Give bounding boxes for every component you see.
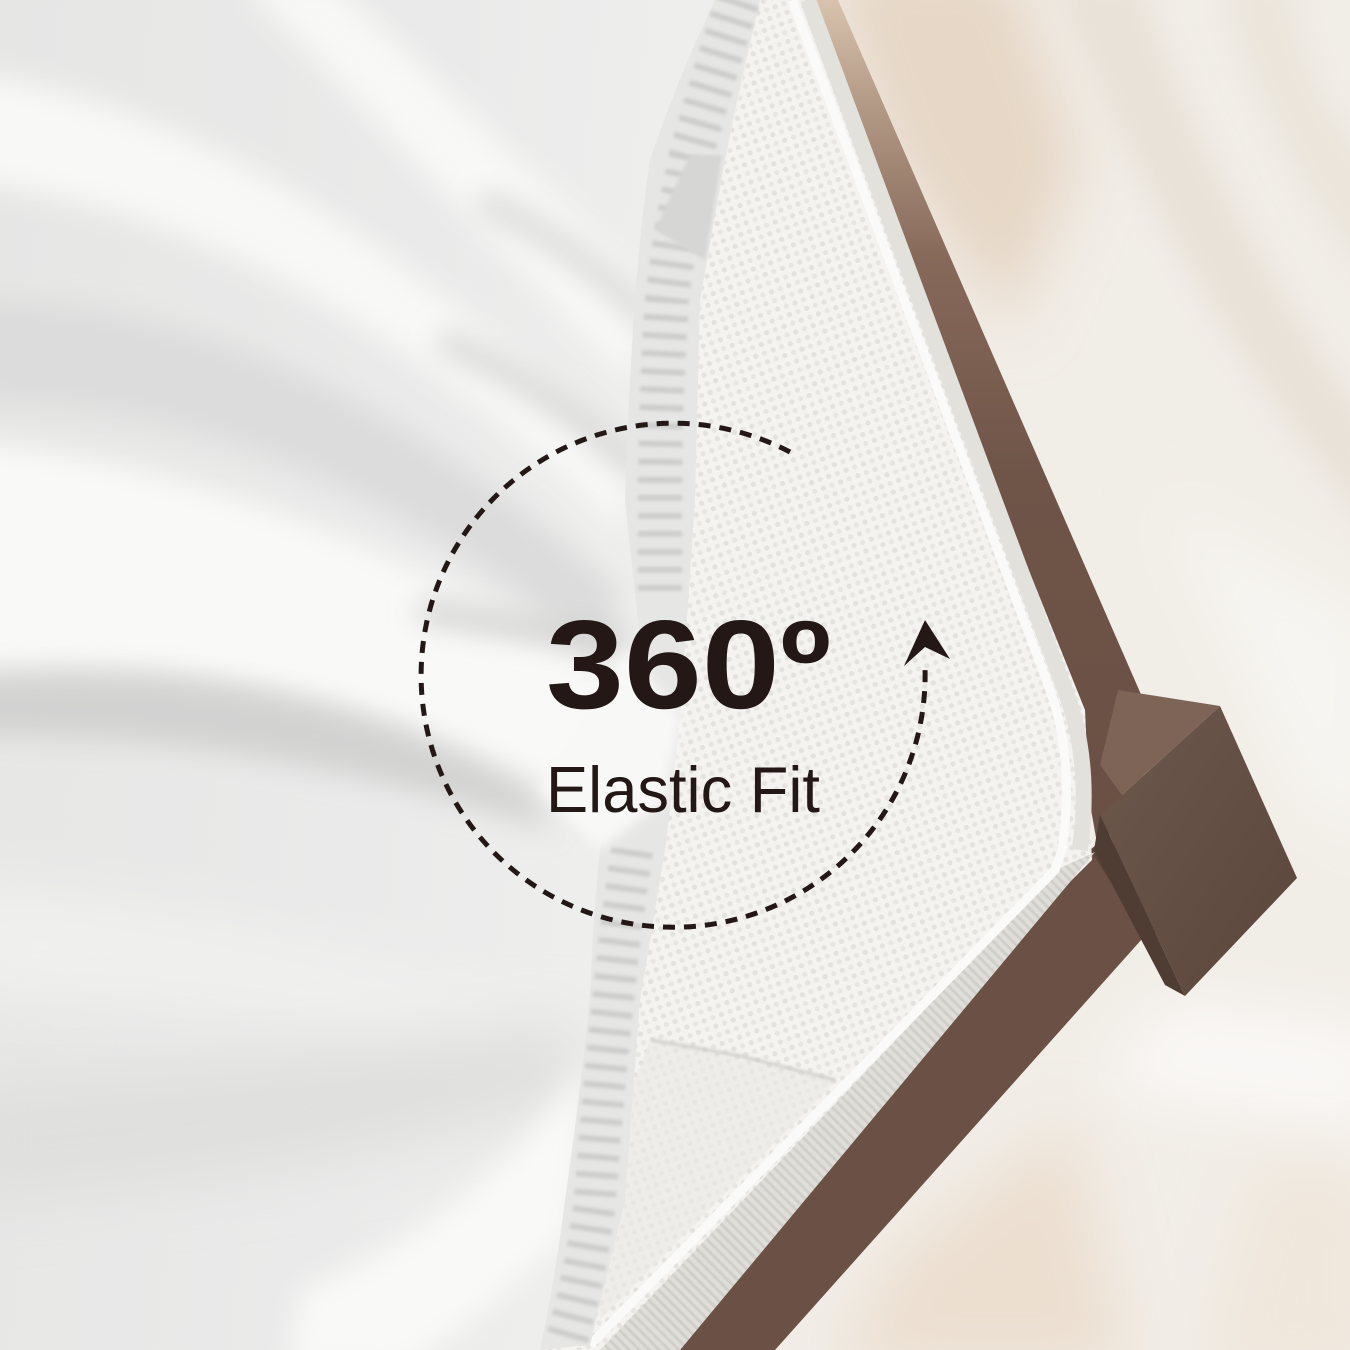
heading: 360 degrees: 360º xyxy=(546,594,831,735)
mattress piping edge xyxy=(808,0,1084,850)
bed frame corner leg xyxy=(1094,690,1297,996)
arrowhead xyxy=(904,620,950,666)
bed frame side rail xyxy=(680,0,1165,1350)
sheet folds xyxy=(0,0,650,1350)
mattress lower panel xyxy=(590,1040,835,1320)
dashed circular arrow xyxy=(421,423,950,927)
white sheet bulge over hem xyxy=(540,650,682,850)
fitted sheet xyxy=(0,0,715,1350)
mattress ribbed side band xyxy=(600,852,1095,1350)
elastic gathered hem xyxy=(540,0,760,1350)
mattress xyxy=(540,0,1095,1350)
subheading: Elastic Fit: Elastic Fit xyxy=(546,753,820,826)
